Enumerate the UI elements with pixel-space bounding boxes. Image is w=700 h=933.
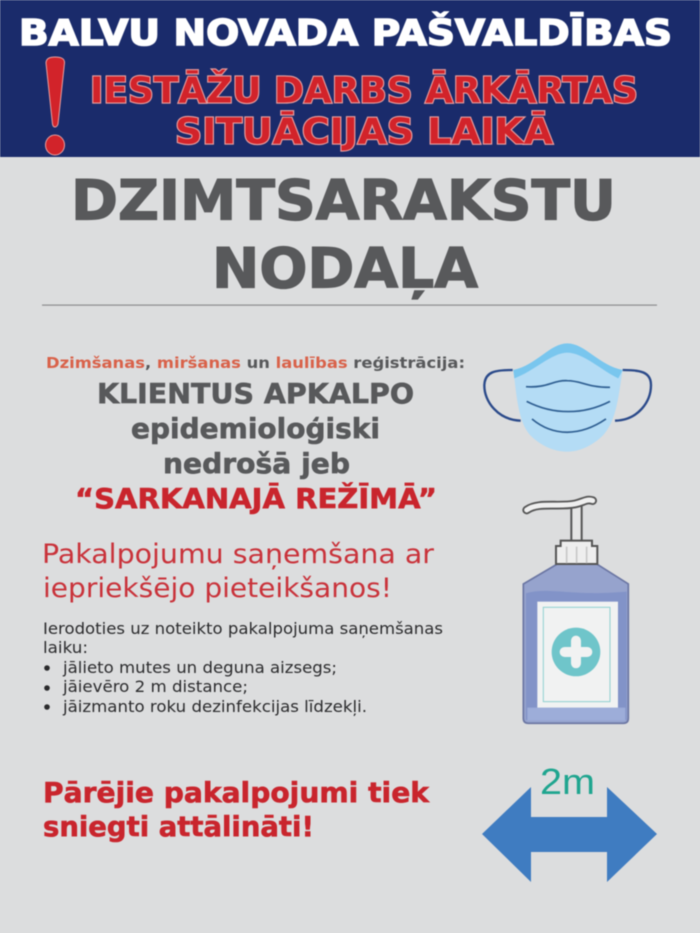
appointment notice: Pakalpojumu saņemšana ar [42, 539, 434, 570]
header title: BALVU NOVADA PAŠVALDĪBAS [19, 12, 672, 54]
department heading [71, 168, 616, 300]
pump stem and nozzle [527, 500, 593, 542]
bottle body [523, 564, 628, 723]
icon: face mask [484, 343, 651, 452]
appointment notice [42, 539, 434, 604]
remote services notice [43, 777, 430, 843]
department heading: NODAĻA [212, 236, 478, 300]
service mode statement: nedrošā jeb [163, 448, 350, 480]
service mode statement [75, 378, 437, 515]
header subtitle: SITUĀCIJAS LAIKĀ [175, 110, 554, 152]
service mode statement: “SARKANAJĀ REŽĪMĀ” [75, 481, 437, 515]
instructions: Ierodoties uz noteikto pakalpojuma saņemšanas [43, 619, 443, 638]
service mode statement: KLIENTUS APKALPO [97, 378, 414, 410]
appointment notice: iepriekšējo pieteikšanos! [43, 573, 392, 604]
instructions: jālieto mutes un deguna aizsegs; [62, 658, 337, 677]
remote services notice: Pārējie pakalpojumi tiek [43, 777, 430, 809]
instructions: jāizmanto roku dezinfekcijas līdzekļi. [62, 697, 367, 716]
department heading: DZIMTSARAKSTU [71, 168, 616, 232]
distance label: 2m [540, 761, 595, 802]
service mode statement: epidemioloģiski [131, 413, 380, 445]
icon: exclamation mark [46, 57, 65, 155]
header subtitle: IESTĀŽU DARBS ĀRKĀRTAS [90, 70, 638, 112]
header panel [0, 0, 700, 157]
icon: hand sanitizer bottle [523, 500, 628, 723]
remote services notice: sniegti attālināti! [43, 811, 314, 843]
instructions: laiku: [43, 638, 88, 657]
icon: 2 metre distance arrow [482, 761, 657, 882]
bottle cap [556, 541, 597, 564]
instructions: jāievēro 2 m distance; [62, 677, 248, 696]
registration intro line: Dzimšanas , miršanas un laulības reģistrācija: [46, 354, 465, 372]
header subtitle [90, 70, 638, 152]
instructions [43, 619, 443, 716]
bottle label [537, 602, 618, 708]
